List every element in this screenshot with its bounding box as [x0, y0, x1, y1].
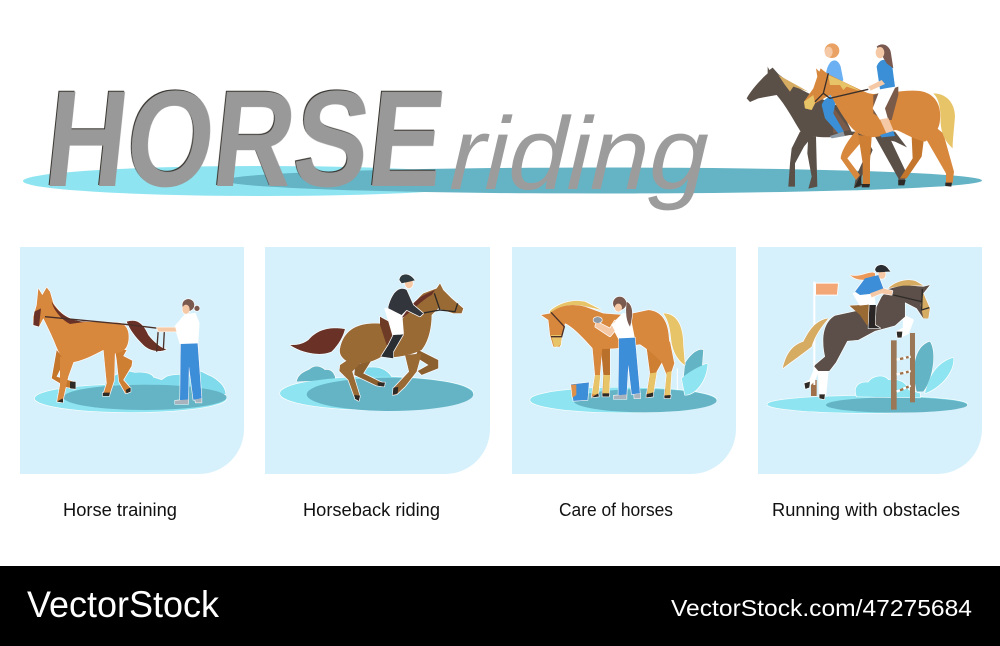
back rider: [822, 43, 850, 138]
caption: Horseback riding: Horseback riding: [303, 499, 440, 520]
panel: Horseback riding: [265, 247, 490, 474]
title: HORSE riding: riding: [448, 96, 710, 211]
panel: Care of horses: [512, 247, 736, 474]
trainer: [157, 299, 202, 404]
ground: [530, 387, 717, 413]
jump poles: [891, 333, 915, 410]
horse: [290, 283, 463, 401]
scene: trainer lunging a horse: [33, 287, 227, 412]
caption: Running with obstacles: Running with obstacles: [772, 499, 960, 520]
ground: [767, 396, 967, 413]
front rider: [868, 44, 898, 137]
scene: groom brushing a horse: [530, 297, 717, 413]
horse: [33, 287, 167, 403]
flag: [811, 282, 839, 396]
ground and bushes: [280, 366, 473, 410]
bush and leaves: [856, 342, 953, 398]
panel: Horse training: [20, 247, 244, 474]
rider: [850, 265, 893, 328]
horse: [783, 280, 930, 399]
plant: [682, 350, 708, 395]
ground ellipses under title: [23, 166, 982, 196]
bucket: [571, 382, 589, 401]
dark horse: [747, 67, 907, 189]
caption: Horse training: Horse training: [63, 499, 177, 520]
footer logo: VectorStock: [27, 584, 219, 625]
title: HORSE riding: HORSE: [39, 63, 452, 216]
illustration: two riders on horses: [747, 43, 955, 189]
footer url: VectorStock.com/47275684: [671, 595, 972, 621]
panel: Running with obstacles: [758, 247, 982, 474]
rider: [381, 274, 423, 358]
horse: [541, 301, 685, 398]
caption: Care of horses: Care of horses: [559, 499, 673, 520]
ground and bushes: [35, 370, 227, 412]
groom: [593, 297, 640, 399]
chestnut horse: [804, 68, 955, 188]
footer bar: [0, 566, 1000, 646]
scene: galloping rider: [280, 274, 473, 411]
scene: horse jumping obstacle: [767, 265, 967, 413]
